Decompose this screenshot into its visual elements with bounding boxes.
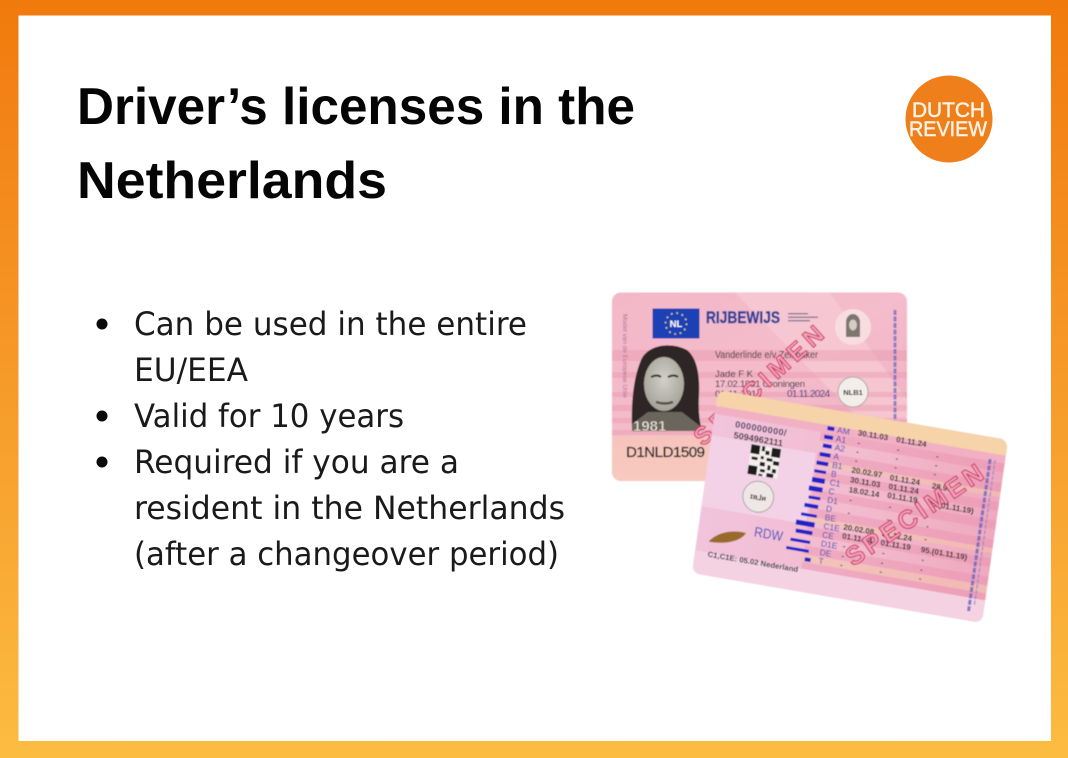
issue and expiry dates: 01.11.19 [880,538,912,552]
license card: front: NLB1 [843,388,863,397]
bullet: residency requirement: (after a changeover period) [134,535,559,573]
category labels: BE [824,512,837,524]
license card: front: NL [670,319,683,330]
category labels: DE [819,547,832,559]
bullet: EU/EEA validity: Can be used in the entire [134,305,527,343]
empty-field dashes: - [847,508,851,518]
empty-field dashes: - [880,558,884,568]
top yellow band [716,390,1008,456]
empty-field dashes: - [879,567,883,577]
category labels: T [818,556,824,566]
empty-field dashes: - [841,551,845,561]
small ghost portrait [835,309,871,345]
vehicle pictograms [785,422,835,563]
empty-field dashes: - [882,548,886,558]
side microtext [894,310,896,422]
bullet: residency requirement: resident in the Netherlands [134,489,565,527]
empty-field dashes: - [849,495,853,505]
category labels: D1 [827,495,839,506]
front SPECIMEN stamp: SPECIMEN [688,320,830,451]
category labels: C1E [823,521,841,534]
empty-field dashes: - [842,542,846,551]
front card data: Vanderlinde e/v Zeilmaker [715,350,819,361]
empty-field dashes: - [926,522,930,531]
empty-field dashes: - [886,515,891,524]
empty-field dashes: - [918,574,922,583]
issue and expiry dates: 95.(01.11.19) [920,545,968,562]
front card data: 01.11.2024 [787,389,830,400]
data stripes [801,432,1005,600]
category labels: AM [837,425,850,437]
category labels: CE [822,529,835,541]
category labels: C [828,486,835,497]
empty-field dashes: - [856,447,860,457]
issue and expiry dates [842,428,983,562]
bullet list [96,305,565,573]
issue and expiry dates: 18.02.14 [848,485,881,499]
portrait photo: 1981 [633,418,666,435]
category labels: A [833,451,840,462]
category labels: B [830,468,838,479]
bullet: validity period: Valid for 10 years [134,397,404,435]
empty-field dashes: - [888,502,892,512]
EU flag [652,308,700,338]
side microtext bars [968,459,990,613]
empty-field dashes: - [921,555,925,565]
front card data: Jade F K [715,369,754,380]
MRZ text: D1NLD1509 [626,444,705,461]
license card: front [612,292,907,481]
empty-field dashes: - [933,470,937,479]
category labels: A1 [835,434,847,445]
empty-field dashes: - [894,463,898,472]
empty-field dashes [840,438,940,583]
bullet: EU/EEA validity: EU/EEA [134,351,248,389]
logo: Dutch Review: REVIEW [909,118,987,141]
empty-field dashes: - [924,535,928,544]
left panel [701,435,816,524]
empty-field dashes: - [840,560,844,570]
empty-field dashes: - [936,452,940,461]
bullet: EU/EEA validity [96,305,527,389]
QR code [747,444,781,479]
issue and expiry dates: 20.02.08 [843,523,875,537]
empty-field dashes: - [854,456,859,465]
issue and expiry dates: 01.11.19 [887,491,919,505]
RIJBEWIJS heading: RIJBEWIJS [706,308,780,327]
title: Netherlands [77,152,387,210]
footer remark: C1,C1E: 05.02 Nederland [707,550,799,574]
logo: Dutch Review [906,76,992,162]
issue and expiry dates: 01.11.24 [888,482,920,496]
issue and expiry dates: 01.11.24 [896,435,928,449]
title: Driver’s licenses in the [77,78,635,136]
issue and expiry dates: 30.11.03 [850,475,882,490]
license card: back: ɪʙ⅃ᴎ [749,491,767,503]
category labels: A2 [834,442,846,454]
issue and expiry dates: 01.11.14 [842,531,874,546]
empty-field dashes: - [934,461,939,470]
empty-field dashes: - [896,445,900,455]
license card: front: Model van de Europese Unie [621,314,628,398]
empty-field dashes: - [895,454,899,463]
issue and expiry dates: 20.02.97 [851,466,883,480]
front card data [715,350,830,400]
issue and expiry dates: 30.11.03 [857,428,889,443]
issue and expiry dates: 01.11.24 [881,529,913,543]
category labels: D [825,503,833,514]
light diagonal sheen [735,293,907,420]
license card: back [692,390,1008,623]
category labels: C1 [829,477,841,489]
category labels: B1 [832,460,843,471]
lower light strip [692,550,985,623]
issue and expiry dates: 01.11.24 [889,473,921,487]
bullet: residency requirement: Required if you are a [134,443,459,481]
logo: Dutch Review: DUTCH [912,99,985,122]
document number: 5094962111 [733,430,784,448]
front card data: 17.02.1981 Groningen [715,379,805,390]
RDW logo and feather [709,516,785,554]
bullet: residency requirement [96,443,565,573]
document number: 000000000/ [735,419,788,438]
mirrored NLB1 seal [741,479,776,515]
document number [733,419,788,449]
back SPECIMEN stamp: SPECIMEN [840,458,989,572]
portrait photo [632,345,702,435]
category labels [818,425,855,568]
issue and expiry dates: 28.96 [931,481,953,494]
horizontal stripes [612,350,907,435]
front card data: 01.11.2014 [715,389,762,400]
NLB1 seal [838,377,868,407]
empty-field dashes: - [857,438,861,448]
issue and expiry dates: 95.(01.11.19) [927,499,975,516]
machine-readable zone [612,436,907,481]
category labels: D1E [820,538,838,551]
title [77,78,635,210]
RDW logo and feather: RDW [753,523,785,544]
empty-field dashes: - [919,565,924,574]
